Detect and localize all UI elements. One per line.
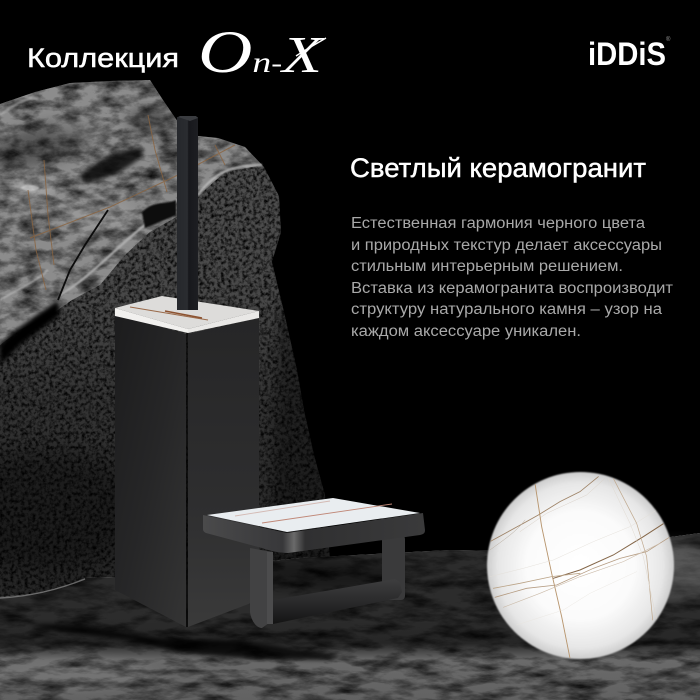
body text: стильным интерьерным решением.	[351, 258, 623, 275]
body text: структуру натурального камня – узор на	[351, 301, 662, 318]
ground shadows	[30, 559, 410, 660]
rock lit face	[0, 80, 262, 345]
tray rim	[203, 513, 425, 553]
holder left face	[115, 314, 186, 627]
holder right face	[188, 318, 259, 627]
body text: и природных текстур делает аксессуары	[351, 237, 662, 254]
ceramic top plate	[115, 296, 259, 333]
marble sphere	[487, 472, 674, 659]
sphere veins	[490, 477, 669, 658]
logo: On-X script: O n-X	[198, 19, 325, 85]
body text: Естественная гармония черного цвета	[351, 215, 645, 232]
tray ceramic top	[207, 498, 420, 532]
paper holder	[203, 498, 425, 628]
rock veins	[28, 115, 235, 290]
heading text: Коллекция	[27, 43, 179, 73]
roll bar	[273, 579, 402, 624]
registered mark: ®	[666, 36, 671, 43]
sphere body	[487, 472, 674, 659]
body text: каждом аксессуаре уникален.	[351, 323, 581, 340]
brush handle	[177, 116, 198, 310]
holder seam	[186, 333, 188, 627]
ground	[0, 533, 700, 700]
body text: Вставка из керамогранита воспроизводит	[351, 280, 673, 297]
brand logo: iddis	[588, 36, 671, 72]
ground surface	[0, 533, 700, 700]
rock dark body	[0, 80, 340, 600]
title: collection	[27, 19, 326, 85]
brush holder	[115, 116, 259, 627]
rock shadow patches and bright ridge	[0, 165, 262, 365]
brand wordmark: iDDiS	[588, 36, 666, 72]
body text	[351, 215, 673, 340]
section heading: Светлый керамогранит	[350, 153, 646, 183]
ground highlight band	[0, 542, 700, 691]
tray veins	[235, 501, 392, 523]
far arm	[382, 535, 405, 600]
near arm	[250, 548, 273, 628]
rock photo	[0, 80, 340, 600]
